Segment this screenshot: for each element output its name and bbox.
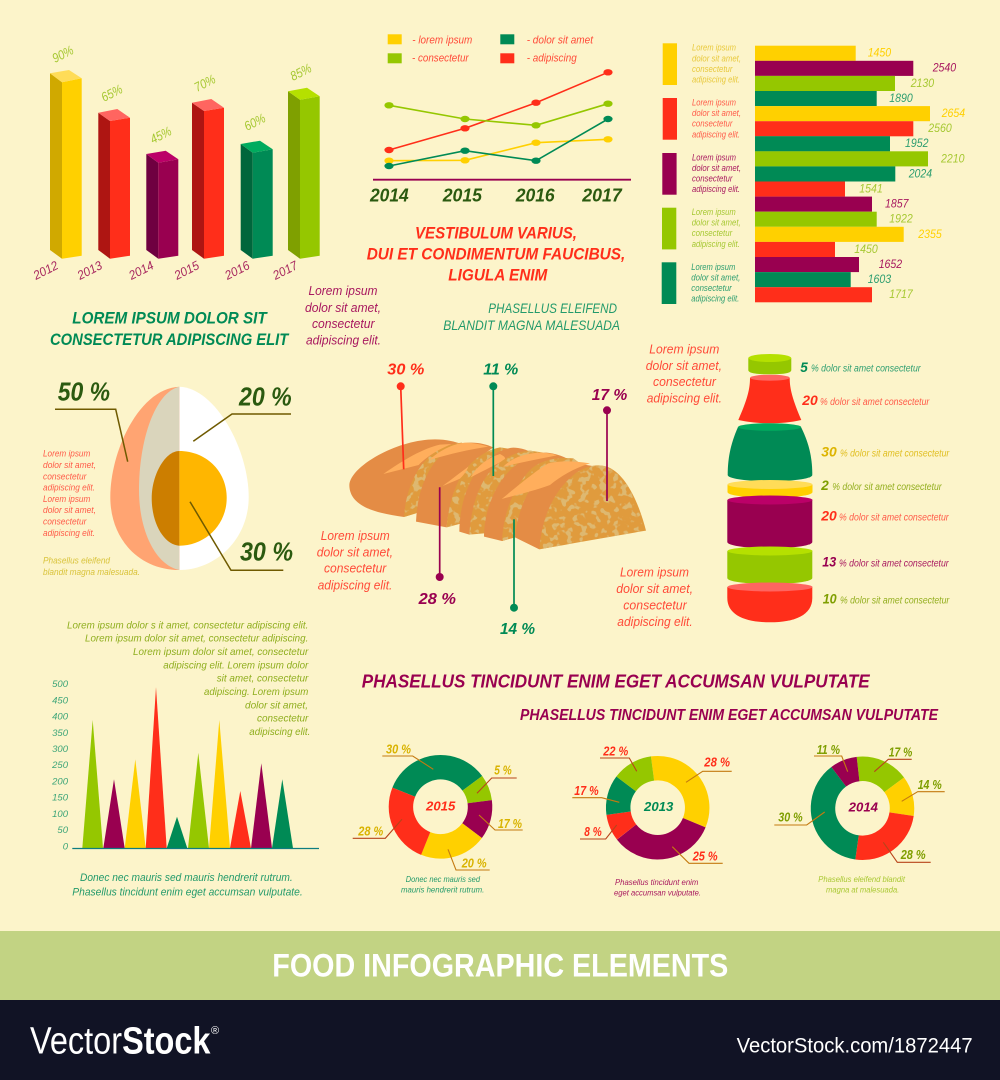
bar values: 2130: [910, 76, 934, 90]
legend texts: Lorem ipsum: [692, 98, 736, 108]
bread text right: [616, 566, 693, 629]
legend texts: consectetur: [691, 283, 733, 293]
donut year: 2015: [425, 799, 456, 814]
donut labels: 28 %: [703, 756, 730, 770]
bar year labels: [30, 258, 301, 283]
bottle labels: % dolor sit amet consectetur: [811, 364, 921, 375]
egg text: adipiscing elit.: [43, 528, 95, 539]
bar values: 1922: [889, 212, 913, 226]
series: dolor sit amet: [384, 116, 613, 169]
bottle neck: [738, 375, 801, 423]
egg diagram: [43, 377, 293, 578]
bar values: 1450: [868, 46, 891, 60]
bar values: 2560: [927, 121, 952, 135]
bottle labels: 20: [820, 508, 837, 523]
bottle labels: 2: [820, 478, 829, 493]
legend texts: dolor sit amet,: [692, 53, 741, 63]
bar values: 1717: [889, 287, 914, 301]
text block: lorem paragraph: adipiscing elit.: [249, 726, 310, 738]
heading: vestibulum: DUI ET CONDIMENTUM FAUCIBUS,: [367, 244, 625, 263]
donut labels: 28 %: [900, 848, 926, 862]
bread text top right: [646, 342, 722, 406]
bread text left: consectetur: [324, 562, 387, 576]
donut labels: 17 %: [498, 817, 522, 831]
donut labels: [357, 742, 522, 871]
donut callouts: [572, 758, 732, 863]
text block: lorem paragraph: Lorem ipsum dolor sit amet, consectetur adipiscing.: [85, 633, 308, 645]
spike caption: Phasellus tincidunt enim eget accumsan vulputate.: [72, 887, 303, 899]
donut labels: 30 %: [386, 742, 411, 756]
title band: [0, 931, 1000, 1000]
donut caption: [614, 877, 701, 898]
legend texts: consectetur: [692, 173, 733, 183]
axis years: 2014: [369, 185, 409, 206]
y axis labels: 500: [52, 679, 69, 690]
donut labels: [574, 744, 730, 863]
egg text: dolor sit amet,: [43, 505, 96, 516]
legend: [388, 34, 594, 64]
legend texts: dolor sit amet,: [692, 108, 741, 118]
bar values: 2210: [940, 151, 965, 165]
legend texts: consectetur: [692, 119, 733, 129]
text block: lorem paragraph: Lorem ipsum dolor s it amet, consectetur adipiscing elit.: [67, 619, 308, 631]
bar 2014: [146, 151, 178, 259]
spike caption: [72, 872, 303, 899]
bread text top right: adipiscing elit.: [647, 392, 722, 406]
bottle labels: % dolor sit amet consectetur: [839, 512, 949, 523]
bottle labels: % dolor sit amet consectetur: [840, 448, 950, 460]
legend texts: dolor sit amet,: [691, 272, 740, 282]
y axis labels: 400: [52, 712, 69, 723]
legend: - dolor sit amet: [527, 34, 594, 46]
egg text: Lorem ipsum: [43, 449, 90, 460]
bar percentage labels: 60%: [242, 110, 268, 134]
bread text top right: consectetur: [653, 375, 717, 389]
legend texts: Lorem ipsum: [692, 152, 736, 162]
donut labels: [778, 743, 942, 862]
egg text: consectetur: [43, 516, 87, 528]
donut labels: 8 %: [584, 825, 602, 839]
text block: lorem paragraph: adipiscing. Lorem ipsum: [204, 686, 309, 698]
text block: purple lorem: Lorem ipsum: [308, 284, 378, 298]
bar percentage labels: 90%: [50, 42, 76, 66]
legend swatches: [662, 43, 677, 304]
text block: lorem paragraph: adipiscing elit. Lorem ipsum dolor: [163, 659, 309, 671]
egg text: dolor sit amet,: [43, 460, 96, 471]
y axis labels: 0: [63, 841, 69, 852]
bottle labels: % dolor sit amet consectetur: [820, 397, 930, 408]
bar year labels: 2016: [222, 258, 252, 283]
legend texts: Lorem ipsum: [691, 262, 736, 272]
donut segments: [602, 752, 713, 863]
bottle base: [727, 582, 812, 622]
bread text right: consectetur: [623, 599, 688, 613]
heading: phasellus tincidunt 2: PHASELLUS TINCIDUNT ENIM EGET ACCUMSAN VULPUTATE: [520, 707, 939, 724]
text block: purple lorem: adipiscing elit.: [306, 334, 381, 348]
donut callouts: [353, 756, 523, 870]
subheading: phasellus: BLANDIT MAGNA MALESUADA: [443, 317, 620, 333]
donut chart 2014: [774, 743, 945, 895]
donut labels: 20 %: [461, 857, 487, 871]
bar percentage labels: 85%: [288, 60, 314, 84]
donut segments: [385, 751, 496, 862]
pin 28%: 28 %: [418, 591, 456, 608]
bar year labels: 2012: [30, 258, 61, 283]
y axis labels: 350: [52, 728, 69, 739]
bread diagram: [317, 342, 722, 638]
bar year labels: 2014: [126, 258, 156, 283]
donut caption: mauris hendrerit rutrum.: [401, 885, 484, 895]
legend texts: dolor sit amet,: [692, 218, 741, 228]
bar year labels: 2015: [171, 258, 202, 283]
donut labels: 14 %: [918, 778, 942, 792]
spike caption: Donec nec mauris sed mauris hendrerit rutrum.: [80, 872, 293, 884]
bread text left: dolor sit amet,: [317, 545, 393, 559]
legend texts: adipiscing elit.: [691, 294, 739, 304]
subheading: phasellus: [443, 300, 620, 333]
bar values: 1652: [879, 257, 902, 271]
legend texts: consectetur: [692, 228, 733, 238]
bar percentage labels: 70%: [192, 71, 218, 95]
text block: lorem paragraph: Lorem ipsum dolor sit amet, consectetur: [133, 646, 309, 658]
donut labels: 28 %: [357, 825, 383, 839]
pin 17%: 17 %: [592, 387, 627, 404]
bread text right: adipiscing elit.: [617, 615, 693, 629]
bar year labels: 2017: [270, 258, 301, 283]
bottle shoulder: [728, 423, 812, 481]
axis years: [369, 185, 623, 206]
donut labels: 17 %: [574, 784, 599, 798]
donut caption: eget accumsan vulputate.: [614, 888, 701, 898]
bar 2012: [50, 70, 82, 259]
y axis labels: 100: [52, 809, 69, 820]
legend texts: adipiscing elit.: [692, 239, 740, 249]
bar values: 2355: [917, 227, 942, 241]
egg text: adipiscing elit.: [43, 483, 95, 494]
bottle labels: 20: [801, 393, 818, 408]
bottle labels: 10: [823, 592, 837, 607]
donut caption: Phasellus eleifend blandit: [818, 874, 906, 884]
subheading: phasellus: PHASELLUS ELEIFEND: [488, 300, 617, 316]
egg caption: blandit magna malesuada.: [43, 567, 140, 578]
egg caption: Phasellus eleifend: [43, 555, 111, 566]
legend texts: adipiscing elit.: [692, 184, 740, 194]
donut labels: 17 %: [889, 745, 912, 759]
heading: vestibulum: [367, 223, 625, 285]
legend: - lorem ipsum: [412, 34, 472, 46]
egg percentages: [58, 377, 293, 567]
horizontal bar chart: [662, 43, 965, 304]
series: consectetur: [384, 100, 613, 128]
donut labels: 25 %: [692, 849, 718, 863]
donut chart 2013: [572, 744, 732, 898]
bottle diagram: [727, 354, 950, 622]
bar values: 1541: [859, 182, 883, 196]
legend texts: adipiscing elit.: [692, 129, 740, 139]
bread text top right: Lorem ipsum: [649, 342, 719, 356]
text block: purple lorem: consectetur: [312, 317, 375, 331]
y axis labels: 200: [51, 776, 69, 787]
bar values: 1603: [868, 272, 891, 286]
line chart: [369, 34, 631, 206]
bottle labels: 30: [821, 445, 837, 460]
pin 11%: 11 %: [483, 361, 518, 378]
legend texts: Lorem ipsum: [692, 207, 736, 217]
callout lines: [55, 409, 291, 570]
bar year labels: 2013: [74, 258, 105, 283]
bottle labels: [800, 360, 950, 607]
text block: purple lorem: [305, 284, 381, 348]
pin 11%: [483, 361, 518, 476]
bread text top right: dolor sit amet,: [646, 359, 722, 373]
egg shell: [179, 387, 249, 570]
donut year: 2014: [848, 800, 879, 815]
donut caption: [401, 874, 484, 895]
egg text: [43, 449, 96, 539]
axis years: 2017: [581, 185, 623, 206]
text block: lorem paragraph: dolor sit amet,: [245, 699, 308, 711]
bottle labels: % dolor sit amet consectetur: [832, 482, 942, 493]
bread text left: adipiscing elit.: [318, 578, 392, 592]
bar values: 1450: [854, 242, 878, 256]
donut segments: [807, 753, 918, 864]
heading: phasellus tincidunt 1: PHASELLUS TINCIDUNT ENIM EGET ACCUMSAN VULPUTATE: [362, 671, 871, 691]
bottle band lime: [727, 546, 812, 584]
bottle labels: % dolor sit amet consectetur: [839, 558, 949, 569]
bar 2017: [288, 88, 320, 259]
watermark url: VectorStock.com/1872447: [737, 1035, 973, 1058]
donut labels: 30 %: [778, 810, 803, 824]
legend texts: adipiscing elit.: [692, 74, 740, 84]
heading: vestibulum: VESTIBULUM VARIUS,: [415, 223, 577, 242]
y axis labels: 150: [52, 792, 69, 804]
y axis labels: 450: [52, 695, 69, 706]
axis years: 2015: [442, 185, 483, 206]
pin 14%: [500, 519, 535, 638]
3D bar chart: [30, 42, 320, 283]
heading: lorem ipsum: [50, 308, 290, 349]
legend texts: dolor sit amet,: [692, 163, 741, 173]
bar values: 1890: [889, 91, 913, 105]
donut labels: 5 %: [494, 764, 512, 778]
y axis labels: 300: [52, 744, 69, 755]
bar 2016: [241, 141, 273, 259]
text block: lorem paragraph: [67, 619, 310, 738]
pin 30%: 30 %: [387, 361, 424, 378]
text block: lorem paragraph: consectetur: [257, 713, 309, 725]
registered mark: ®: [211, 1025, 219, 1037]
egg percentages: 20 %: [238, 382, 292, 412]
bars: [755, 46, 930, 302]
bar values: 2024: [908, 166, 932, 180]
main title: FOOD INFOGRAPHIC ELEMENTS: [272, 948, 728, 984]
pin 14%: 14 %: [500, 621, 535, 638]
text block: purple lorem: dolor sit amet,: [305, 301, 381, 315]
legend: - consectetur: [412, 52, 470, 64]
bread text right: dolor sit amet,: [616, 582, 693, 596]
bar values: 2654: [941, 106, 965, 120]
donut caption: [818, 874, 906, 895]
bar values: 1952: [905, 136, 929, 150]
bread loaf: [349, 439, 646, 549]
donut callouts: [774, 756, 945, 862]
watermark bar: [0, 1000, 1000, 1080]
bottle cap: [748, 354, 791, 374]
spike chart: [51, 679, 319, 899]
egg percentages: 30 %: [240, 537, 293, 567]
legend texts: Lorem ipsum: [692, 43, 736, 53]
heading: vestibulum: LIGULA ENIM: [448, 266, 548, 285]
bar percentage labels: [50, 42, 314, 147]
bar values: 1857: [885, 197, 910, 211]
pin 17%: [592, 387, 627, 501]
bottle band purple: [727, 496, 812, 548]
heading: lorem ipsum: CONSECTETUR ADIPISCING ELIT: [50, 330, 290, 349]
bread text left: [317, 529, 393, 592]
watermark logo: VectorStock: [30, 1020, 211, 1062]
egg text: consectetur: [43, 471, 87, 482]
series: adipiscing: [384, 69, 613, 153]
y axis labels: 250: [51, 760, 69, 771]
pin 30%: [387, 361, 424, 469]
legend: - adipiscing: [527, 52, 577, 64]
bar values: 2540: [932, 61, 956, 75]
bottle labels: 13: [822, 554, 837, 569]
spikes: [82, 687, 293, 848]
donut chart 2015: [353, 742, 523, 895]
egg text: Lorem ipsum: [43, 494, 90, 505]
egg caption: [43, 555, 140, 578]
bar values: [854, 46, 965, 301]
bottle band yellow: [728, 480, 812, 498]
bottle labels: 5: [800, 360, 808, 375]
text block: lorem paragraph: sit amet, consectetur: [217, 673, 309, 685]
bar 2015: [192, 99, 224, 259]
axis years: 2016: [515, 185, 555, 206]
donut caption: magna at malesuada.: [826, 885, 899, 895]
egg yolk: [152, 451, 227, 546]
pin 28%: [418, 487, 456, 608]
series: lorem ipsum: [384, 136, 613, 164]
bottle labels: % dolor sit amet consectetur: [840, 596, 950, 607]
y axis labels: [51, 679, 69, 852]
bar percentage labels: 65%: [99, 81, 125, 105]
egg percentages: 50 %: [58, 377, 110, 407]
heading: lorem ipsum: LOREM IPSUM DOLOR SIT: [72, 308, 268, 327]
donut labels: 22 %: [602, 744, 628, 758]
bread text left: Lorem ipsum: [321, 529, 390, 543]
donut year: 2013: [643, 799, 674, 814]
legend texts: [691, 43, 741, 304]
donut caption: Phasellus tincidunt enim: [615, 877, 698, 887]
bread text right: Lorem ipsum: [620, 566, 689, 580]
donut caption: Donec nec mauris sed: [406, 874, 480, 884]
legend texts: consectetur: [692, 64, 733, 74]
y axis labels: 50: [57, 825, 69, 836]
bar 2013: [98, 109, 130, 259]
bar percentage labels: 45%: [148, 123, 174, 147]
donut labels: 11 %: [817, 743, 840, 757]
